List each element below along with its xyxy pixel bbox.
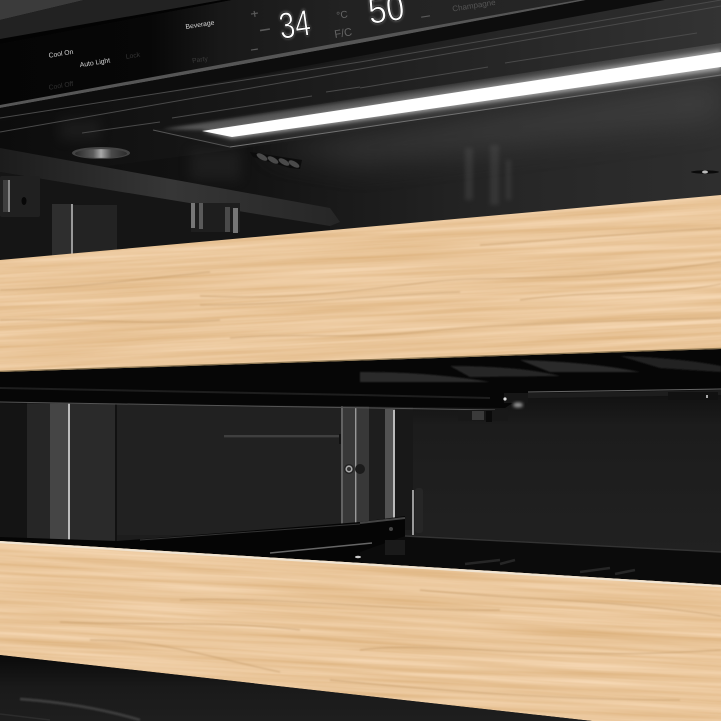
wood grain lines	[60, 590, 721, 700]
ceiling of the cooler	[0, 0, 721, 180]
left post	[50, 402, 69, 542]
upper rail assembly	[0, 330, 721, 422]
rail end clip	[504, 393, 528, 403]
wood grain lines	[0, 228, 721, 338]
middle compartment	[0, 340, 721, 590]
temperature readouts	[276, 0, 407, 47]
vent slots	[250, 152, 302, 169]
control labels: Cool On	[48, 49, 74, 60]
lower drawer front	[0, 542, 721, 715]
control labels: Beverage	[185, 20, 215, 31]
control labels: Cool Off	[48, 81, 74, 92]
back wall reflections	[465, 145, 511, 205]
ceiling trim lines	[0, 0, 721, 133]
round ceiling fitting	[72, 147, 130, 159]
glow below the light	[260, 80, 721, 165]
upper post	[52, 204, 117, 260]
right back wall	[413, 395, 721, 552]
floor below lower drawer	[0, 655, 592, 721]
side rail of upper compartment	[0, 148, 340, 226]
upper compartment back wall	[0, 0, 721, 300]
lower rail and tray	[0, 516, 721, 592]
control labels: Auto Light	[79, 57, 111, 69]
wall beneath the rail	[0, 172, 330, 262]
middle back wall	[0, 340, 721, 590]
temperature readouts: 34	[276, 1, 313, 47]
control labels: Party	[192, 56, 209, 65]
upper drawer front	[0, 228, 721, 372]
LED light strip	[202, 50, 721, 139]
light housing	[153, 43, 721, 147]
control labels: Lock	[125, 52, 141, 61]
control panel	[0, 0, 665, 122]
temperature readouts: 34	[276, 1, 313, 47]
plus and minus controls	[251, 11, 430, 51]
unit labels	[334, 9, 353, 41]
left bracket	[0, 176, 40, 217]
screw	[344, 464, 354, 474]
right post	[341, 406, 369, 524]
panel lower edge highlight	[0, 0, 586, 108]
small clip on right wall	[691, 170, 719, 174]
far left wall	[0, 400, 30, 542]
unit labels: F/C	[334, 26, 353, 41]
unit labels: °C	[336, 9, 349, 22]
control labels	[48, 0, 497, 92]
centre bracket	[191, 203, 240, 233]
top edge trim	[0, 0, 232, 44]
centre wall panel	[117, 405, 342, 535]
